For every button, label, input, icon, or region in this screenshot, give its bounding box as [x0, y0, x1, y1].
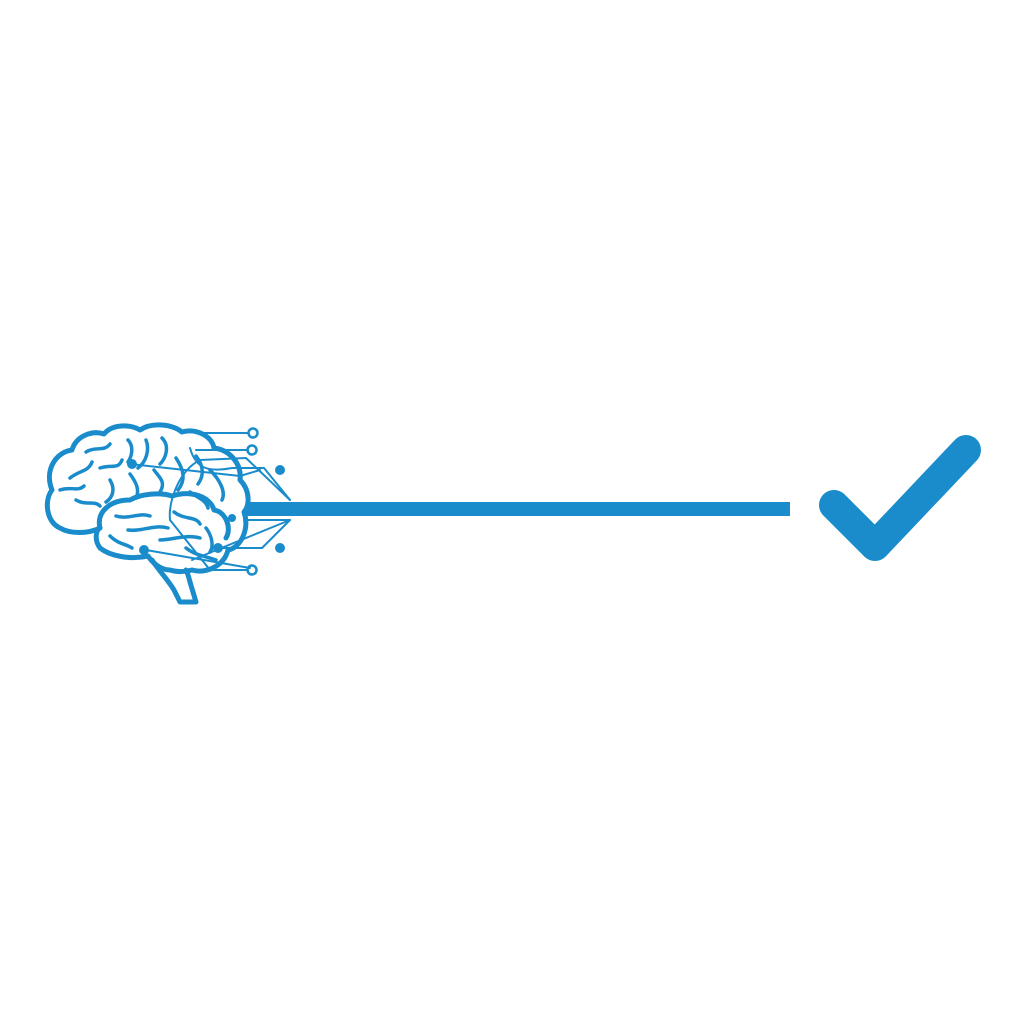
- folds: [60, 438, 223, 560]
- temporal lobe: [99, 494, 228, 538]
- circuit lines: [130, 433, 290, 570]
- icon: checkmark: [834, 450, 966, 546]
- brain stem: [152, 560, 196, 602]
- brain outline: [47, 425, 248, 572]
- circuit nodes: [248, 428, 258, 574]
- bar: progress line: [246, 502, 790, 516]
- icon: brain with circuits: [47, 425, 290, 602]
